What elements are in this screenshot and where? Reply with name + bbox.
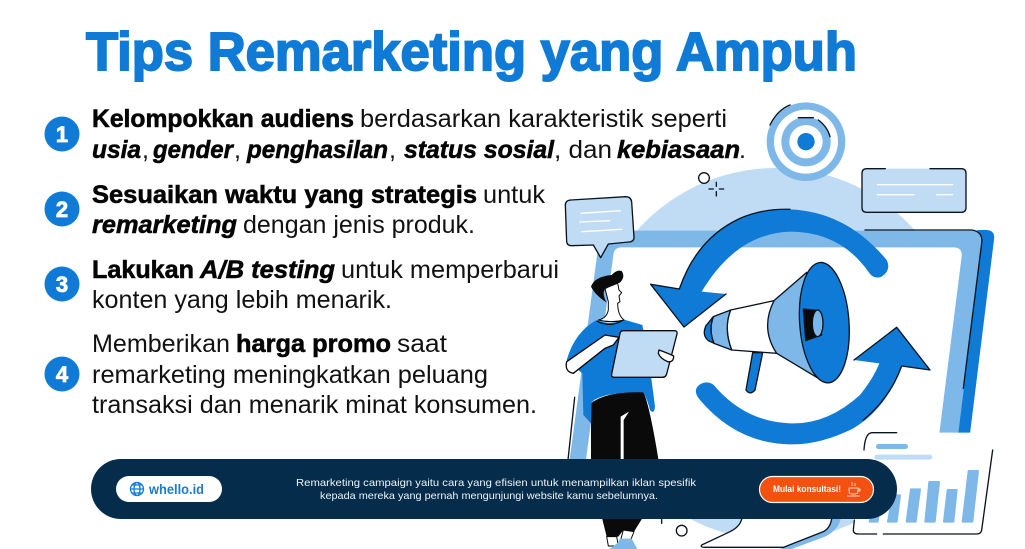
bars bbox=[870, 471, 978, 522]
tip 3 bbox=[44, 256, 559, 314]
banner description bbox=[296, 477, 697, 502]
logo pill bbox=[116, 476, 222, 502]
tablet bbox=[612, 331, 677, 377]
head and neck bbox=[598, 283, 624, 322]
legs bbox=[591, 392, 659, 463]
number badge 1: 1 bbox=[56, 122, 68, 147]
person bbox=[566, 271, 677, 463]
refresh arrows bbox=[651, 209, 930, 444]
footer banner bbox=[91, 459, 897, 519]
hand bbox=[658, 350, 674, 362]
tip 1 text: , bbox=[389, 136, 396, 164]
upper arrow bbox=[651, 209, 888, 327]
shirt bbox=[567, 319, 655, 423]
tip 3 text: A/B testing bbox=[199, 256, 335, 284]
tip 1 bbox=[44, 105, 746, 164]
tip 3 text bbox=[92, 256, 559, 314]
number badge 2 bbox=[44, 192, 80, 226]
tip 2 bbox=[44, 181, 545, 239]
decorative circles and sparkle bbox=[676, 173, 724, 536]
tip 2 text: Sesuaikan waktu yang strategis bbox=[92, 181, 477, 209]
tip 2 text bbox=[92, 181, 545, 239]
tip 4 text: Memberikan bbox=[92, 330, 230, 358]
tip 2 text: remarketing bbox=[92, 211, 237, 239]
tip 4 text: transaksi dan menarik minat konsumen. bbox=[92, 391, 537, 419]
tip 1 text: Kelompokkan audiens bbox=[92, 105, 354, 133]
monitor bbox=[562, 230, 994, 517]
monitor stand bbox=[662, 519, 841, 549]
consult button: Mulai konsultasi! bbox=[773, 484, 841, 495]
illustration bbox=[562, 102, 1002, 549]
tip 1 text: berdasarkan karakteristik seperti bbox=[360, 105, 727, 133]
tip 4 text bbox=[92, 330, 537, 419]
icon: cup bbox=[847, 482, 860, 496]
tip 1 text: kebiasaan bbox=[617, 136, 740, 164]
target icon bbox=[767, 102, 845, 181]
speech bubble bbox=[565, 197, 634, 258]
megaphone bbox=[704, 261, 853, 393]
tip 1 text: , bbox=[142, 136, 149, 164]
tip 3 text: konten yang lebih menarik. bbox=[92, 286, 392, 314]
number badge 4 bbox=[44, 356, 80, 392]
title: Tips Remarketing yang Ampuh bbox=[86, 22, 857, 82]
tip 4 bbox=[44, 330, 537, 419]
consult button bbox=[760, 476, 874, 502]
tip 3 text: Lakukan bbox=[92, 256, 194, 284]
arm bbox=[566, 335, 619, 373]
tip 1 text: , bbox=[234, 136, 241, 164]
tip 1 text: , dan bbox=[554, 136, 612, 164]
tip 4 text: saat bbox=[397, 330, 447, 358]
chat box top right bbox=[862, 169, 966, 212]
tip 4 text: harga promo bbox=[236, 330, 391, 358]
tip 1 text: usia bbox=[92, 136, 141, 164]
number badge 3 bbox=[44, 266, 80, 302]
tip 2 text: dengan jenis produk. bbox=[243, 211, 475, 239]
background circle bbox=[590, 168, 962, 540]
tip 2 text: untuk bbox=[483, 181, 545, 209]
tip 1 text bbox=[92, 105, 746, 164]
tip 1 text: status sosial bbox=[404, 136, 555, 164]
number badge 2: 2 bbox=[56, 197, 68, 222]
tip 1 text: . bbox=[739, 136, 746, 164]
icon: globe bbox=[130, 482, 144, 496]
feet bbox=[602, 517, 643, 549]
banner description: kepada mereka yang pernah mengunjungi website kamu sebelumnya. bbox=[320, 490, 658, 502]
number badge 1 bbox=[44, 116, 80, 152]
banner description: Remarketing campaign yaitu cara yang efisien untuk menampilkan iklan spesifik bbox=[296, 477, 697, 489]
logo pill: whello.id bbox=[148, 481, 204, 497]
tip 1 text: gender bbox=[152, 136, 234, 164]
tip 1 text: penghasilan bbox=[246, 136, 388, 164]
number badge 3: 3 bbox=[56, 272, 68, 297]
tip 3 text: untuk memperbarui bbox=[341, 256, 559, 284]
chart card bbox=[853, 433, 1002, 535]
tip 4 text: remarketing meningkatkan peluang bbox=[92, 361, 488, 389]
lower arrow bbox=[696, 327, 930, 444]
number badge 4: 4 bbox=[56, 362, 69, 387]
